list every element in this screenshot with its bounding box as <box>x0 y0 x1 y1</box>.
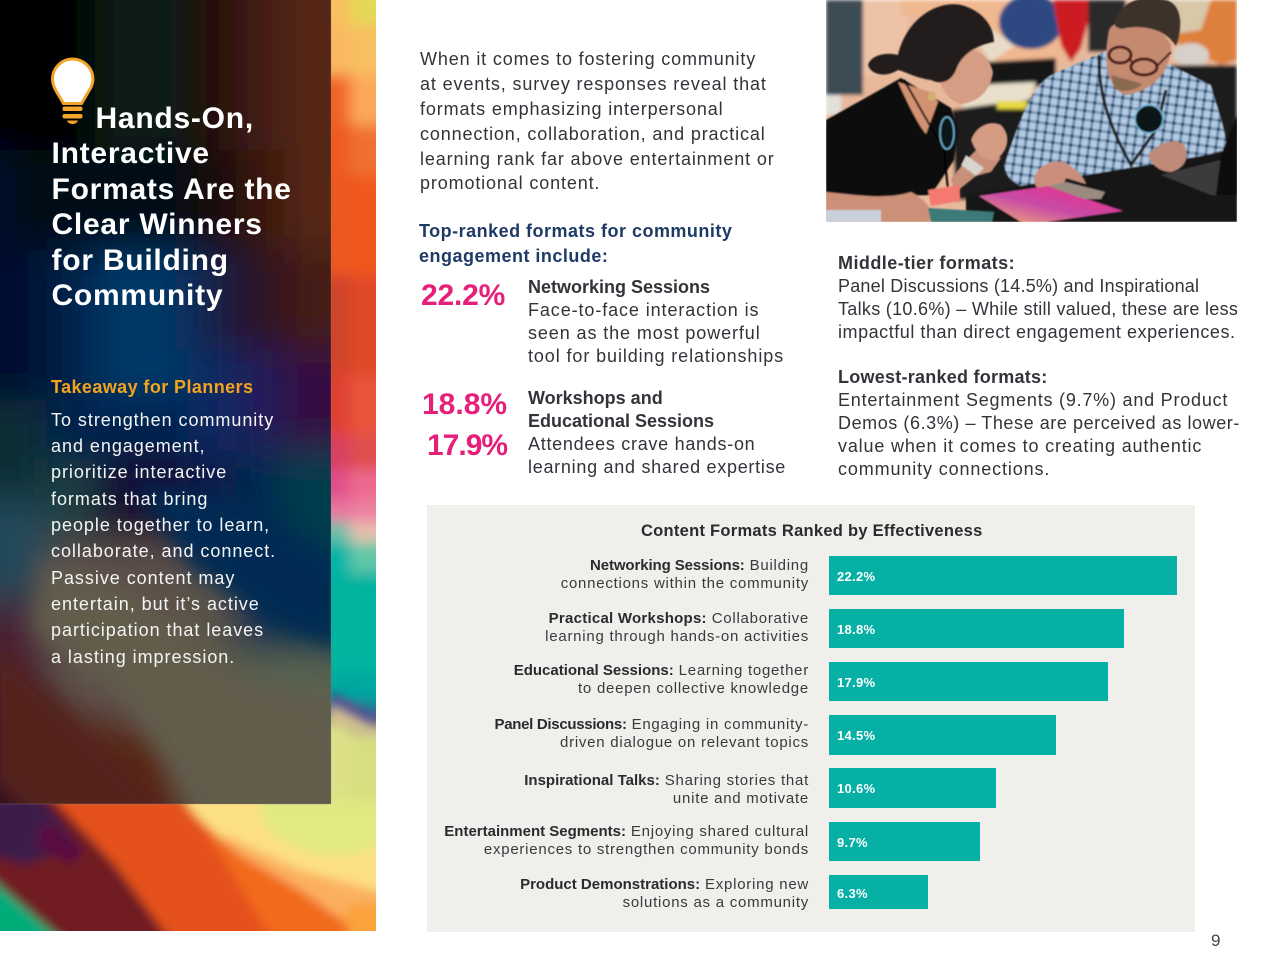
lowest-ranked text: Demos (6.3%) – These are perceived as lower- <box>838 413 1240 433</box>
takeaway text: entertain, but it’s active <box>51 594 260 614</box>
takeaway text: a lasting impression. <box>51 647 235 667</box>
bar: 10.6% <box>829 768 996 808</box>
workshops text: Attendees crave hands-on <box>528 434 755 454</box>
takeaway text: participation that leaves <box>51 620 264 640</box>
bar: 14.5%: 14.5% <box>837 728 875 743</box>
middle-tier text: impactful than direct engagement experiences. <box>838 322 1236 342</box>
title: for Building <box>52 244 229 277</box>
bar: 9.7%: 9.7% <box>837 835 868 850</box>
bar: 14.5% <box>829 715 1056 754</box>
networking sessions text: tool for building relationships <box>528 346 784 366</box>
lowest-ranked text: Entertainment Segments (9.7%) and Product <box>838 390 1228 410</box>
lowest-ranked text: Lowest-ranked formats: <box>838 367 1048 387</box>
intro text block: learning rank far above entertainment or <box>420 149 775 169</box>
bar: 10.6%: 10.6% <box>837 781 875 796</box>
chart title: Content Formats Ranked by Effectiveness <box>641 522 983 540</box>
stat: 18.8%: 18.8% <box>422 388 507 421</box>
label: product demonstrations <box>520 876 809 911</box>
photo: two attendees looking at a phone <box>826 0 1237 222</box>
label: inspirational talks: unite and motivate <box>673 790 809 807</box>
takeaway text: formats that bring <box>51 489 208 509</box>
workshops text: learning and shared expertise <box>528 457 786 477</box>
workshops text: Educational Sessions <box>528 411 714 431</box>
networking sessions text: seen as the most powerful <box>528 322 761 342</box>
label: practical workshops: Practical Workshops: Collaborative <box>549 610 809 627</box>
takeaway text: people together to learn, <box>51 515 270 535</box>
middle-tier text: Talks (10.6%) – While still valued, these are less <box>838 299 1238 319</box>
top-ranked heading <box>419 221 732 266</box>
workshops text <box>528 388 786 477</box>
label: panel discussions <box>494 716 809 750</box>
label: educational sessions: Educational Sessions: Learning together <box>514 662 809 679</box>
lowest-ranked text: value when it comes to creating authentic <box>838 436 1202 456</box>
label: networking sessions: Networking Sessions: Building <box>590 557 809 574</box>
background art panel <box>0 0 376 931</box>
stat: 22.2%: 22.2% <box>421 279 505 312</box>
label: product demonstrations: Product Demonstrations: Exploring new <box>520 876 809 893</box>
workshops text: Workshops and <box>528 388 663 408</box>
middle-tier text: Middle-tier formats: <box>838 253 1015 273</box>
title: Clear Winners <box>52 208 263 241</box>
takeaway text: Passive content may <box>51 568 235 588</box>
label: networking sessions: connections within the community <box>561 575 809 592</box>
stat: 17.9%: 17.9% <box>427 429 507 462</box>
label: networking sessions <box>561 557 809 592</box>
bar: 17.9% <box>829 662 1108 701</box>
bar: 6.3%: 6.3% <box>837 886 868 900</box>
bar: 6.3% <box>829 875 928 909</box>
title: Interactive <box>52 137 210 170</box>
label: inspirational talks: Inspirational Talks: Sharing stories that <box>524 772 809 789</box>
label: educational sessions: to deepen collective knowledge <box>578 680 809 697</box>
intro text block: at events, survey responses reveal that <box>420 74 767 94</box>
intro text block: promotional content. <box>420 173 600 193</box>
networking sessions text: Face-to-face interaction is <box>528 300 759 320</box>
title <box>52 102 292 312</box>
takeaway text: To strengthen community <box>51 410 274 430</box>
title: Community <box>52 279 223 312</box>
bar: 17.9%: 17.9% <box>837 675 875 690</box>
bar: 9.7% <box>829 822 980 861</box>
top-ranked heading: Top-ranked formats for community <box>419 221 732 241</box>
takeaway text: collaborate, and connect. <box>51 541 276 561</box>
label: panel discussions: Panel Discussions: Engaging in community- <box>494 716 809 732</box>
takeaway heading: Takeaway for Planners <box>51 377 253 397</box>
intro text block: formats emphasizing interpersonal <box>420 99 724 119</box>
bar: 18.8%: 18.8% <box>837 622 875 637</box>
takeaway text <box>51 410 276 667</box>
middle-tier text: Panel Discussions (14.5%) and Inspirational <box>838 276 1199 296</box>
bar chart panel <box>427 505 1195 932</box>
page number: 9 <box>1211 930 1220 950</box>
label: practical workshops: learning through hands-on activities <box>545 628 809 645</box>
label: panel discussions: driven dialogue on relevant topics <box>560 734 809 750</box>
icon: light bulb <box>51 58 94 124</box>
networking sessions text <box>528 276 784 366</box>
label: inspirational talks <box>524 772 809 807</box>
bar: 22.2%: 22.2% <box>837 569 875 584</box>
intro text block: connection, collaboration, and practical <box>420 124 766 144</box>
bar: 18.8% <box>829 609 1124 648</box>
label: product demonstrations: solutions as a community <box>623 894 809 911</box>
takeaway text: and engagement, <box>51 436 206 456</box>
top-ranked heading: engagement include: <box>419 246 608 266</box>
lowest-ranked text: community connections. <box>838 459 1050 479</box>
title: Formats Are the <box>52 173 292 206</box>
title: Hands-On, <box>96 102 254 135</box>
middle-tier text <box>838 253 1238 342</box>
takeaway text: prioritize interactive <box>51 462 227 482</box>
networking sessions text: Networking Sessions <box>528 276 710 296</box>
label: educational sessions <box>514 662 809 697</box>
intro text block: When it comes to fostering community <box>420 49 756 69</box>
label: entertainment segments <box>444 823 809 858</box>
intro text block <box>420 49 775 193</box>
bar: 22.2% <box>829 556 1177 595</box>
lowest-ranked text <box>838 367 1240 479</box>
label: entertainment segments: Entertainment Segments: Enjoying shared cultural <box>444 823 809 840</box>
label: practical workshops <box>545 610 809 645</box>
label: entertainment segments: experiences to strengthen community bonds <box>484 841 809 858</box>
